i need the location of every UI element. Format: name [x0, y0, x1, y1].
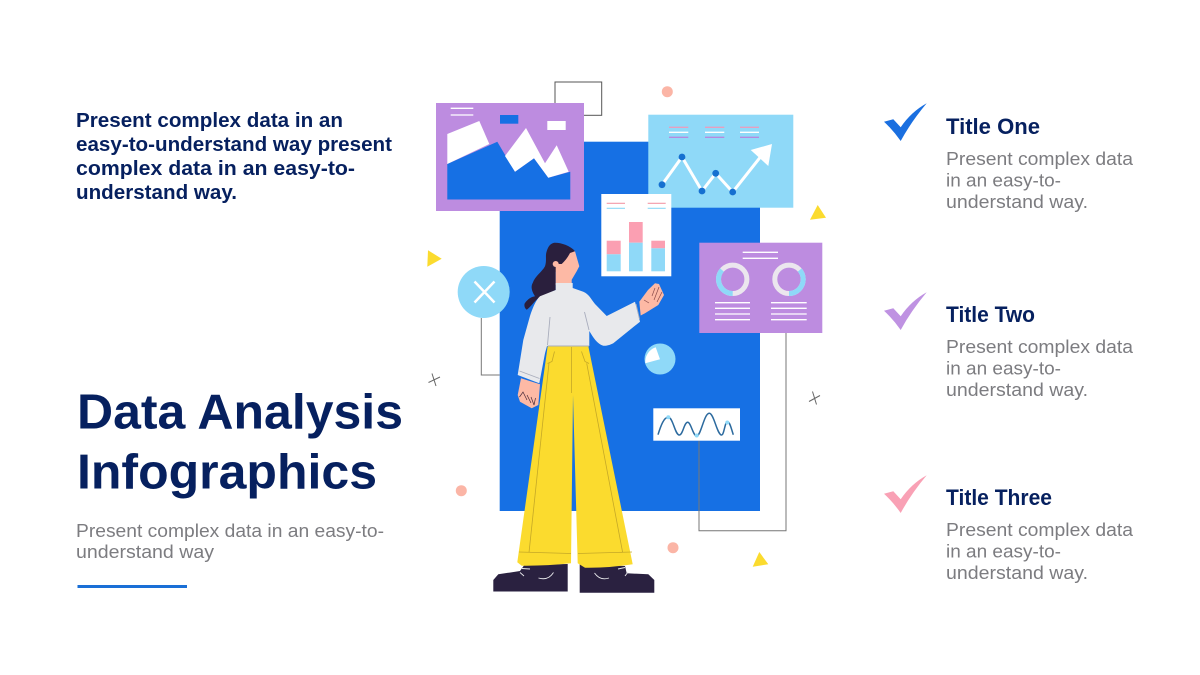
panel: line chart with arrow — [648, 115, 793, 208]
accent underline — [78, 585, 187, 588]
main title — [77, 386, 403, 500]
icon: purple check — [884, 292, 927, 330]
subtitle: understand way — [76, 542, 214, 562]
item: title two: understand way. — [946, 380, 1088, 400]
icon: close circle — [458, 266, 510, 318]
item: title three: understand way. — [946, 563, 1088, 583]
intro paragraph: complex data in an easy-to- — [76, 158, 355, 180]
decorative crosses — [428, 374, 820, 404]
item: title two: in an easy-to- — [946, 358, 1061, 378]
central illustration — [427, 82, 826, 593]
item: title two — [884, 292, 1134, 400]
item: title one — [884, 103, 1134, 212]
outline square — [555, 82, 602, 115]
item: title one: Title One — [946, 114, 1040, 139]
decorative triangles — [427, 205, 826, 567]
icon: blue check — [884, 103, 927, 141]
intro paragraph: understand way. — [76, 182, 237, 204]
shoes — [493, 564, 568, 592]
hair — [524, 243, 575, 310]
item: title three: Title Three — [946, 485, 1052, 510]
face and neck — [556, 251, 579, 285]
subtitle: Present complex data in an easy-to- — [76, 521, 384, 541]
icon: pink check — [884, 475, 927, 513]
intro paragraph: Present complex data in an — [76, 110, 343, 132]
main title: Infographics — [77, 446, 377, 500]
pant seams — [519, 347, 632, 554]
item: title one: understand way. — [946, 192, 1088, 212]
icon: pie chart — [644, 344, 676, 374]
subtitle — [76, 521, 384, 562]
pants — [517, 346, 633, 568]
panel: donut charts — [699, 243, 822, 333]
intro paragraph: easy-to-understand way present — [76, 134, 392, 156]
connector lines — [481, 318, 786, 531]
main title: Data Analysis — [77, 386, 403, 440]
decorative dots — [456, 86, 678, 553]
left hand — [518, 378, 540, 408]
item: title three: in an easy-to- — [946, 542, 1061, 562]
item: title three: Present complex data — [946, 520, 1134, 540]
panel: mountain chart — [436, 103, 584, 211]
item: title two: Title Two — [946, 302, 1035, 327]
item: title one: in an easy-to- — [946, 170, 1061, 190]
right hand — [639, 283, 664, 316]
sweater folds — [520, 304, 640, 378]
item: title three — [884, 475, 1134, 583]
panel: wave chart — [653, 408, 740, 441]
item: title two: Present complex data — [946, 337, 1134, 357]
ear — [553, 261, 559, 267]
sweater — [518, 283, 640, 383]
item: title one: Present complex data — [946, 149, 1134, 169]
blue backdrop — [500, 142, 760, 511]
shoe highlights — [520, 568, 628, 579]
panel: stacked bar chart — [601, 194, 671, 276]
intro paragraph — [76, 110, 392, 204]
figure: woman presenting — [493, 243, 664, 593]
